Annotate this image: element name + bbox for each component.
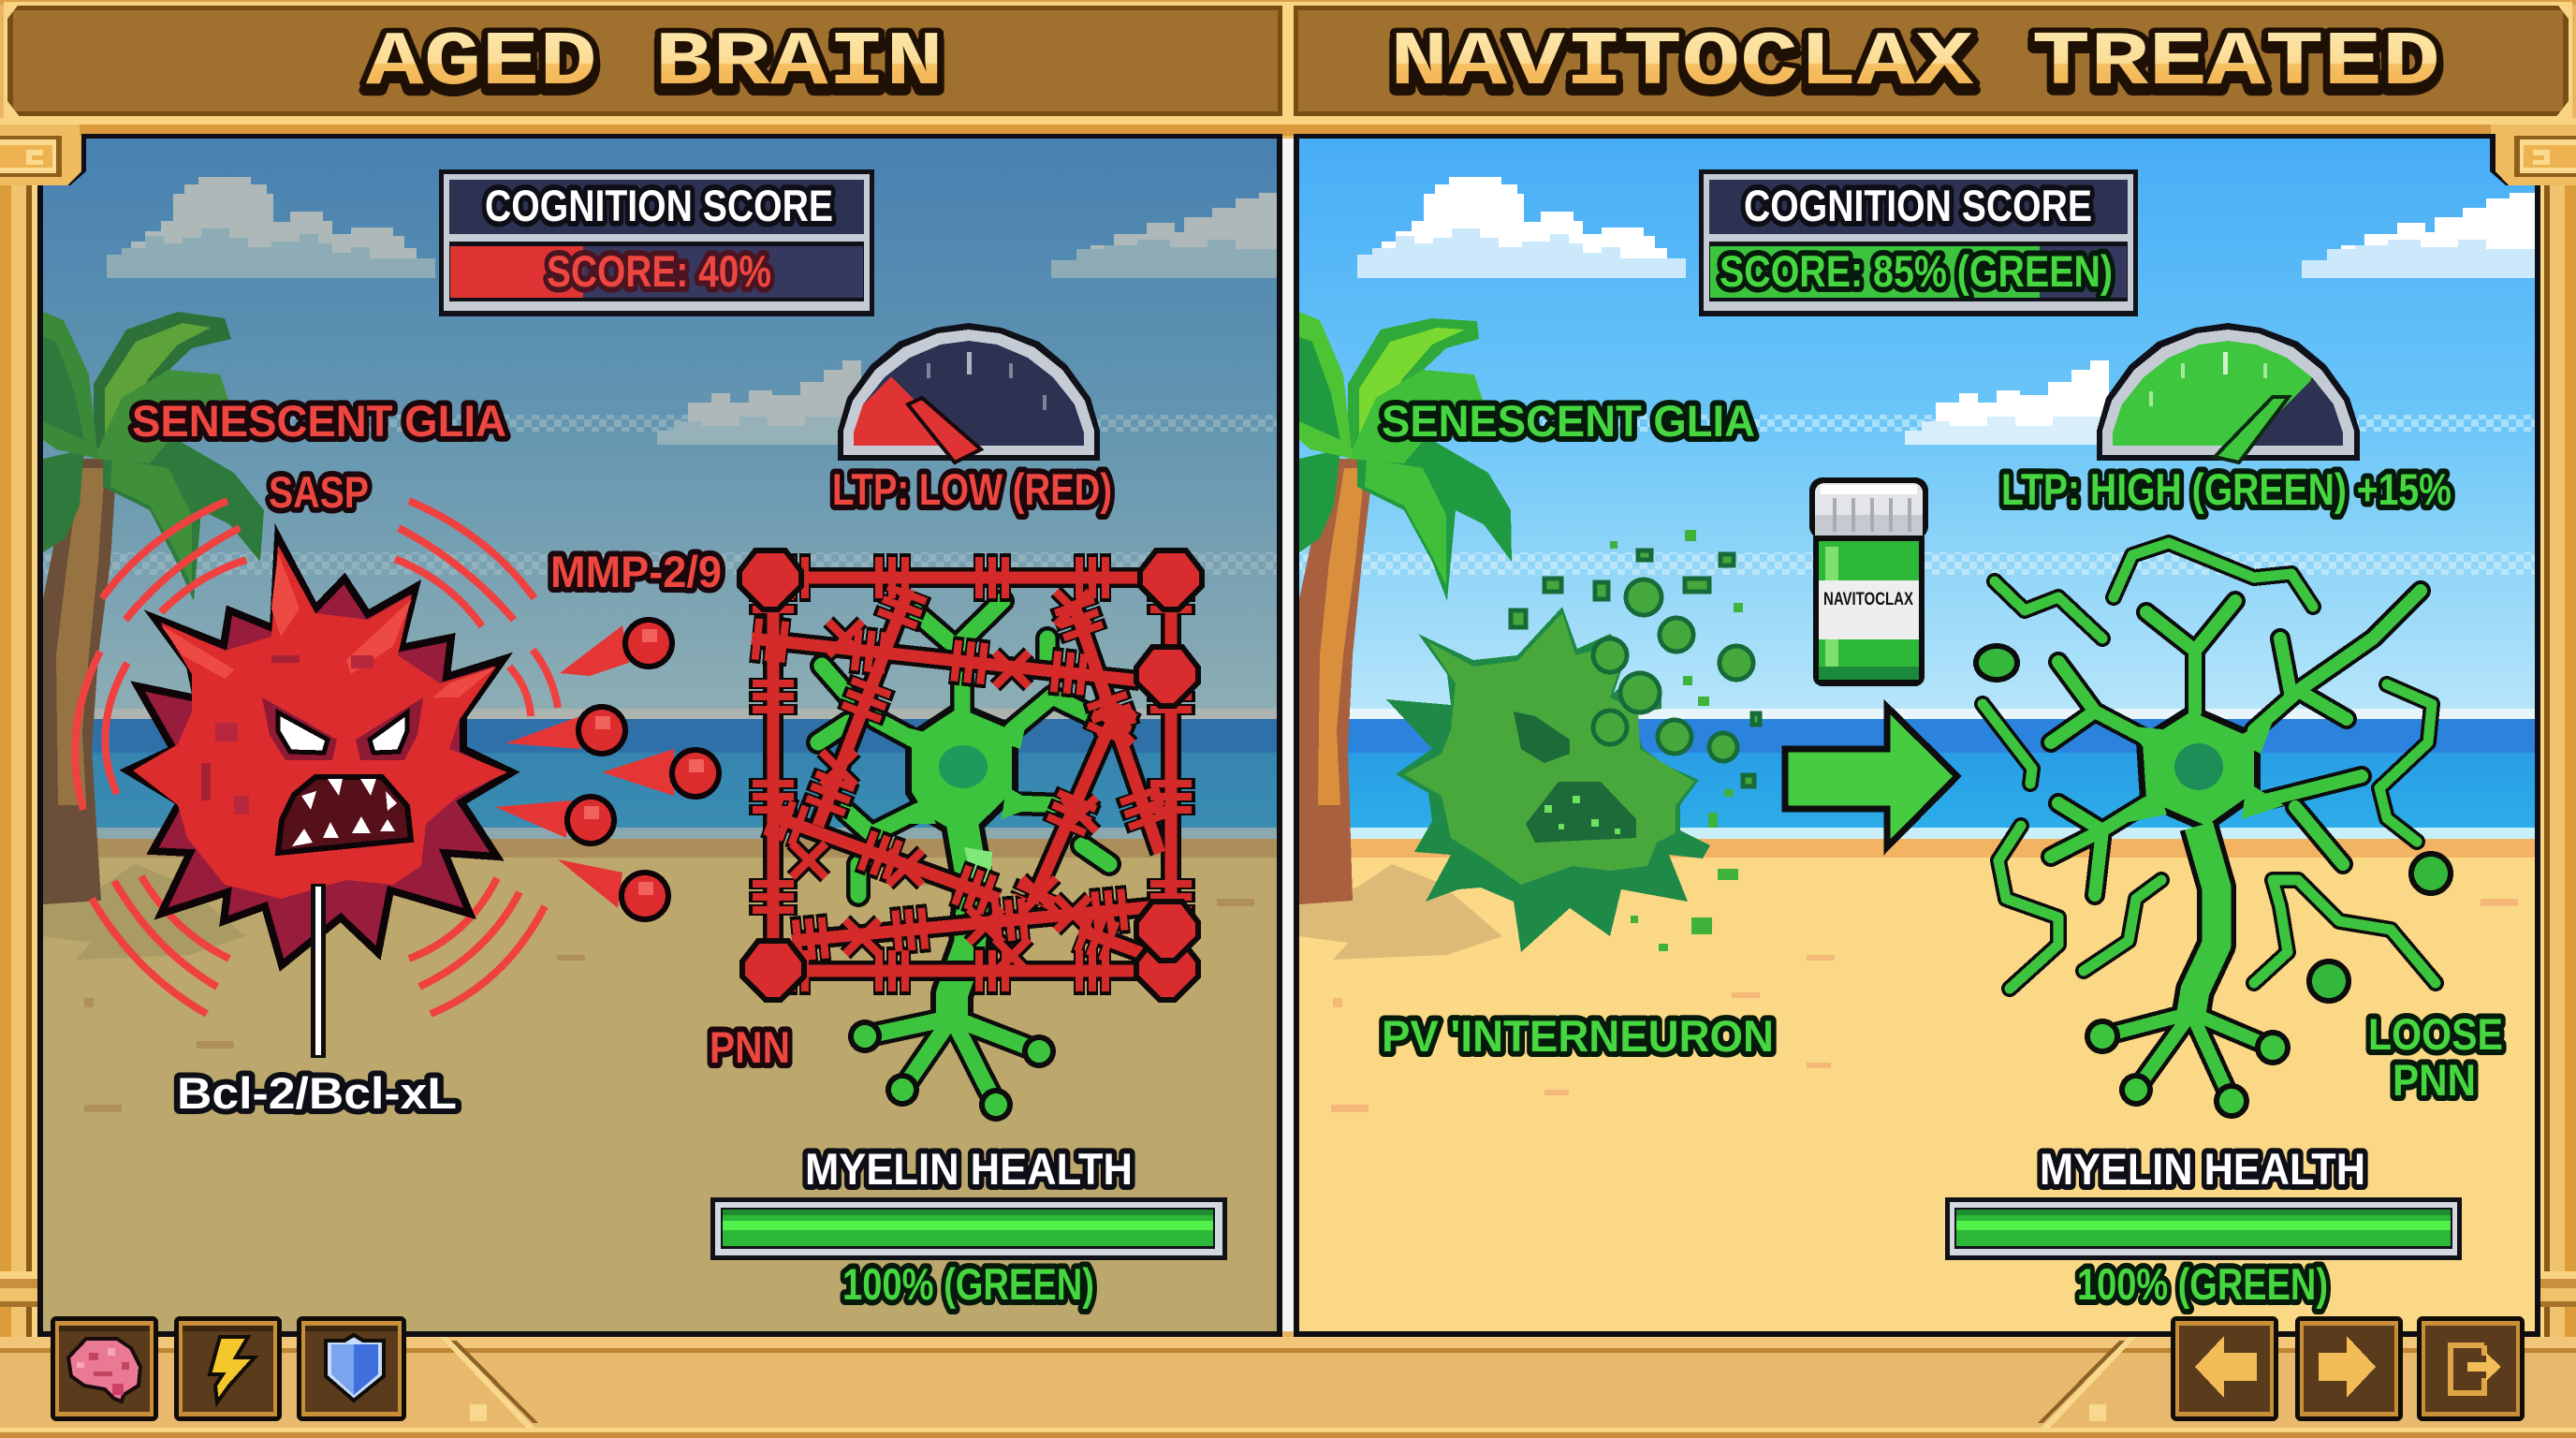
button: brain xyxy=(51,1316,158,1421)
button: forward xyxy=(2295,1316,2403,1421)
icon: exit door xyxy=(2451,1345,2501,1393)
panel: aged brain xyxy=(37,134,1282,1337)
title bar: navitoclax treated xyxy=(1288,2,2572,118)
barbed wire perineuronal net xyxy=(739,550,1202,1000)
pill bottle: navitoclax xyxy=(1809,477,1928,686)
icon: shield xyxy=(326,1335,384,1401)
glia eyes xyxy=(262,697,423,760)
label: loose PNN xyxy=(2368,1009,2503,1105)
label: LTP high: LTP: HIGH (GREEN) +15% xyxy=(2001,464,2452,514)
palm tree: right xyxy=(1299,312,1512,904)
myelin health meter xyxy=(1945,1144,2462,1309)
value: score 40%: SCORE: 40% xyxy=(547,246,771,296)
label: LTP low: LTP: LOW (RED) xyxy=(832,464,1112,514)
MMP projectiles xyxy=(495,620,719,919)
bottom rail xyxy=(0,1337,2576,1438)
panel: navitoclax treated xyxy=(1282,134,2544,1337)
icon: brain xyxy=(68,1339,140,1401)
value: 100% green: 100% (GREEN) xyxy=(842,1259,1094,1309)
character: angry senescent glia xyxy=(127,537,512,965)
nucleus xyxy=(2174,743,2223,790)
myelin health meter xyxy=(710,1144,1227,1309)
glia mouth and teeth xyxy=(278,777,411,853)
neuron: freed PV interneuron xyxy=(2051,591,2421,1116)
label: MMP-2/9: MMP-2/9 xyxy=(550,547,722,596)
label: senescent glia: SENESCENT GLIA xyxy=(1382,396,1755,446)
button: energy xyxy=(174,1316,282,1421)
faded eyes xyxy=(1514,712,1570,763)
gauge: LTP low xyxy=(838,323,1100,462)
button: shield xyxy=(297,1316,406,1421)
icon: left arrow xyxy=(2195,1336,2257,1398)
crumbling mouth xyxy=(1526,782,1636,843)
scene background: dull beach xyxy=(37,134,1282,1337)
label: PNN: PNN xyxy=(710,1022,790,1072)
pointer line to Bcl label xyxy=(311,884,326,1058)
loose PNN fragments xyxy=(1976,543,2451,1001)
heading: AGED BRAIN: AGED BRAIN xyxy=(366,20,944,107)
cognition score box xyxy=(439,169,874,316)
heading: NAVITOCLAX TREATED: NAVITOCLAX TREATED xyxy=(1390,26,2440,113)
label: myelin health: MYELIN HEALTH xyxy=(2040,1144,2365,1194)
bottle cap xyxy=(1809,477,1928,539)
value: 100% green: 100% (GREEN) xyxy=(2077,1259,2328,1309)
icon: lightning bolt xyxy=(210,1337,255,1402)
label: myelin health: MYELIN HEALTH xyxy=(805,1144,1133,1194)
label: cognition score: COGNITION SCORE xyxy=(485,181,833,230)
cognition score box xyxy=(1699,169,2138,316)
label: loose PNN: LOOSE xyxy=(2368,1009,2503,1059)
neuron: trapped PV interneuron xyxy=(818,601,1109,1119)
gauge: LTP high xyxy=(2097,323,2360,462)
label: Bcl-2/Bcl-xL: Bcl-2/Bcl-xL xyxy=(177,1068,457,1118)
value: score 85% green: SCORE: 85% (GREEN) xyxy=(1720,246,2113,296)
left pillar and corner plate xyxy=(0,125,80,1337)
nucleus xyxy=(939,745,988,788)
bottle label xyxy=(1819,580,1919,639)
label: cognition score: COGNITION SCORE xyxy=(1744,181,2092,230)
label: PV interneuron: PV 'INTERNEURON xyxy=(1382,1011,1774,1061)
title bar: aged brain xyxy=(4,2,1288,118)
label: loose PNN: PNN xyxy=(2393,1055,2476,1105)
arrow: treatment direction xyxy=(1785,707,1957,847)
label: SASP: SASP xyxy=(269,467,369,517)
character: disintegrating glia xyxy=(1386,530,1760,952)
scene background: bright beach xyxy=(1282,134,2544,1337)
bottle text: NAVITOCLAX xyxy=(1823,590,1913,609)
button: exit xyxy=(2417,1316,2525,1421)
particles breaking off xyxy=(1511,550,1760,786)
palm tree: left xyxy=(43,312,264,904)
button: back xyxy=(2171,1316,2278,1421)
heading: NAVITOCLAX TREATED: NAVITOCLAX TREATED xyxy=(1390,20,2440,107)
shock waves around glia xyxy=(75,501,558,1014)
label: senescent glia: SENESCENT GLIA xyxy=(132,396,506,446)
heading: AGED BRAIN: AGED BRAIN xyxy=(366,26,944,113)
right pillar and corner plate xyxy=(2491,125,2576,1337)
icon: right arrow xyxy=(2319,1336,2376,1398)
